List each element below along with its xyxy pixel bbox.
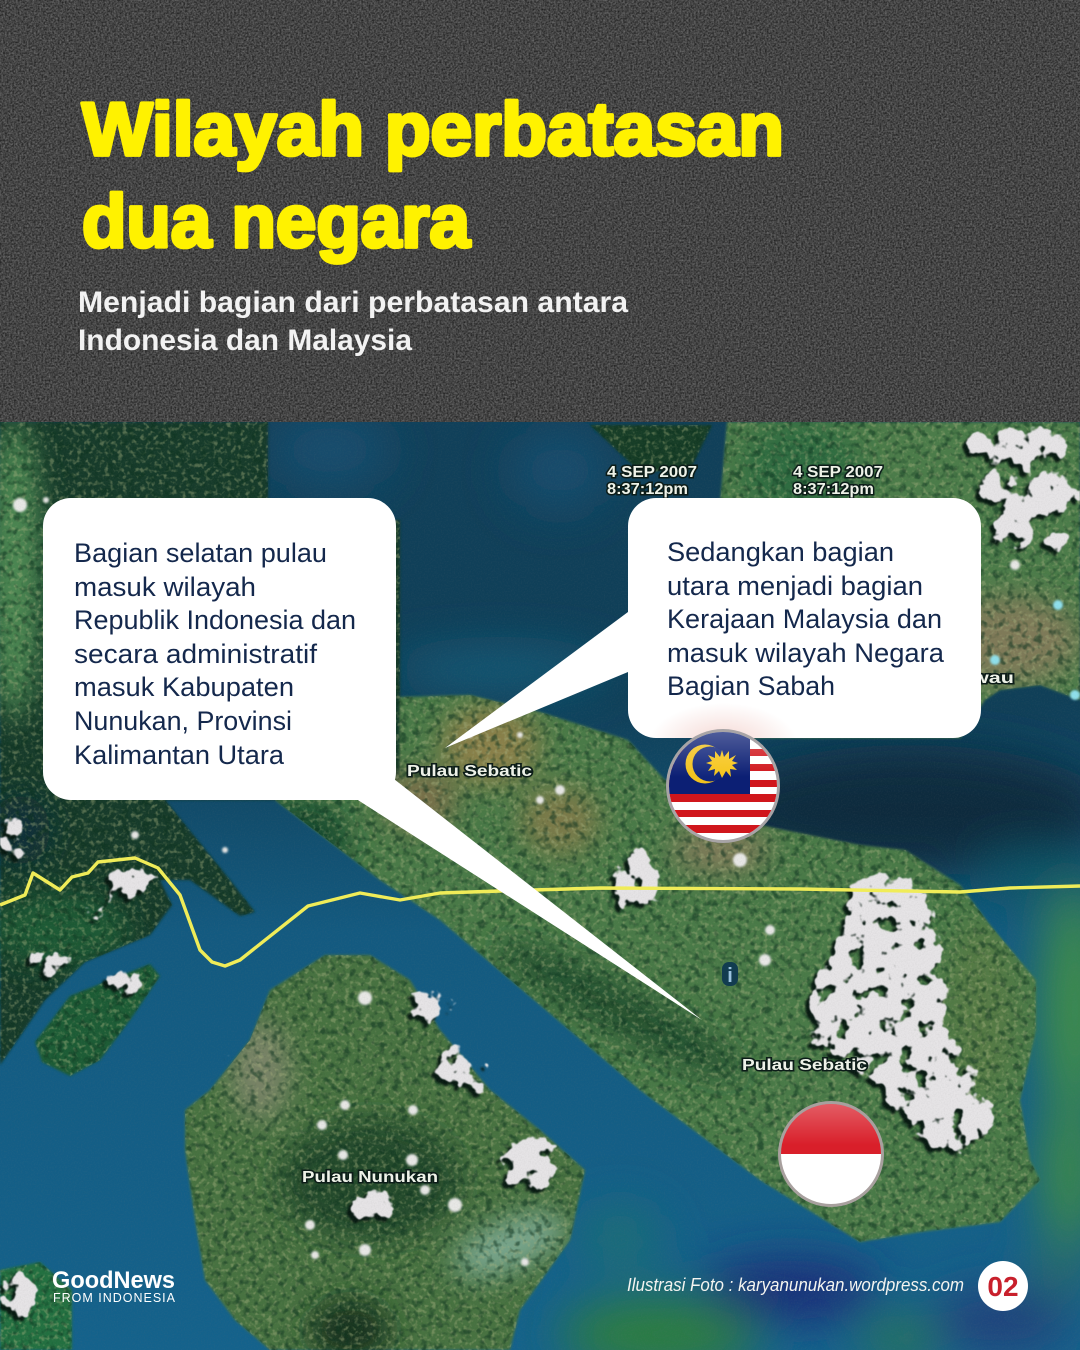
callout text: south [74,538,356,770]
callout text: south: Kalimantan Utara [74,740,285,770]
callout text: north [667,537,945,701]
clouds [0,423,1080,1319]
callout text: south: Republik Indonesia dan [74,605,356,635]
satellite map [0,410,1080,1350]
map labels: wau [971,670,1014,687]
icon: Malaysia flag [666,729,780,843]
icon: map info marker: i [727,965,733,987]
subtitle [78,286,628,357]
page number: 02 [987,1271,1019,1302]
callout: south [43,498,702,1020]
border line [0,858,1080,966]
subtitle: Indonesia dan Malaysia [78,324,412,357]
land tones [0,420,1080,1350]
map labels [302,464,1014,1186]
callout text: south: masuk Kabupaten [74,672,294,702]
callout text: north: Kerajaan Malaysia dan [667,604,942,634]
callout text: north: Sedangkan bagian [667,537,894,567]
header panel [0,0,1080,422]
callout text: south: Bagian selatan pulau [74,538,327,568]
land texture [0,422,1080,1350]
title: dua negara [82,179,471,263]
small cloud puffs [13,497,1020,1266]
icon: map info marker [722,962,738,987]
map labels: 4 SEP 2007 [793,464,883,481]
callout text: south: secara administratif [74,639,318,669]
sea tones [270,410,1080,1350]
callout text: north: masuk wilayah Negara [667,638,945,668]
map labels: Pulau Nunukan [302,1169,438,1186]
land masses [0,422,1080,1350]
subtitle: Menjadi bagian dari perbatasan antara [78,286,628,319]
map labels: 4 SEP 2007 [607,464,697,481]
callout text: north: Bagian Sabah [667,671,835,701]
title [82,87,784,263]
map labels: 8:37:12pm [793,481,874,498]
page number [978,1261,1028,1311]
callout text: south: Nunukan, Provinsi [74,706,292,736]
map labels: Pulau Sebatic [742,1057,867,1074]
icon: Indonesia flag [778,1101,884,1207]
map labels: Pulau Sebatic [407,763,532,780]
photo credit: Ilustrasi Foto : karyanunukan.wordpress.com [627,1275,964,1295]
map labels: 8:37:12pm [607,481,688,498]
logo: GoodNews [52,1267,175,1294]
logo: FROM INDONESIA [53,1291,176,1305]
city lights [990,600,1080,700]
callout: north [445,498,981,748]
callout text: north: utara menjadi bagian [667,571,923,601]
callout text: south: masuk wilayah [74,572,256,602]
title: Wilayah perbatasan [82,87,784,171]
